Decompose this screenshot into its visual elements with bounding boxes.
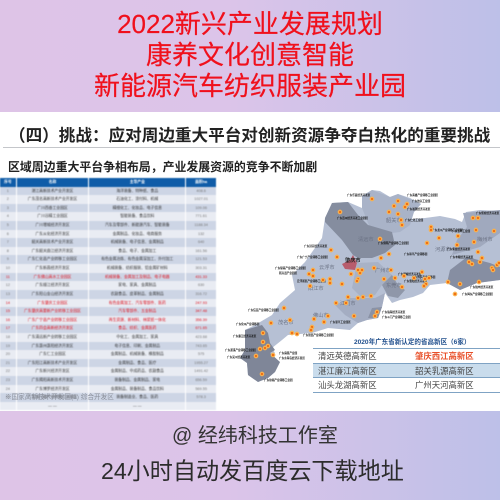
park name labels [225, 193, 500, 382]
table: regional platforms: 汽车及零部件、新能源汽车、智能装备 [105, 223, 170, 227]
table: regional platforms: 17 [6, 326, 10, 330]
table: regional platforms: — — [48, 404, 57, 408]
park name labels: 广东斗门产业转移工业园 [382, 315, 411, 319]
zone name: 韶关乳源高新区 [415, 366, 474, 376]
table: regional platforms: 6 [7, 232, 9, 236]
table: regional platforms: 石油化工、涂付料、机械 [116, 197, 158, 201]
park name labels: 广东惠阳经济开发区 [404, 279, 428, 283]
table: regional platforms: 23 [6, 378, 10, 382]
table: regional platforms: 广川谷精工业园区 [37, 214, 68, 218]
row highlight [313, 363, 500, 377]
park name labels: 广东吴川经济开发区 [227, 355, 251, 359]
park name labels: 广东蕉岭经济开发区 [476, 211, 500, 215]
table: regional platforms: 金属制品、食品、医疗 [118, 361, 156, 365]
table: regional platforms: 广东阳江高新技术产业开发区 [28, 361, 77, 365]
city labels: 梅州市 [477, 235, 493, 243]
table: regional platforms: 广东清远新产业转移工业园区 [28, 335, 77, 339]
table: regional platforms: 575 [198, 352, 204, 356]
table: regional platforms: 广东新兴经济开发区 [35, 369, 70, 373]
table: regional platforms: 640 [198, 240, 204, 244]
table: regional platforms: 21 [6, 361, 10, 365]
park name labels: 广东阳西产业转移工业园区 [303, 333, 335, 337]
table: regional platforms: 广川西香工业园区 [37, 206, 68, 210]
table: regional platforms: 771.61 [195, 214, 207, 218]
footer band [0, 411, 500, 500]
table: regional platforms: 广东仁化县产业转移工业园区 [28, 257, 77, 261]
footer download note: 24小时自动发百度云下载地址 [101, 458, 404, 484]
table: regional platforms: 广东肇庆高要新产业转移工业园区 [24, 309, 81, 313]
heading rule [3, 147, 500, 148]
park name labels: 广东广宁产业转移工业园区 [297, 255, 329, 259]
city labels: 茂名市 [278, 318, 294, 326]
city labels [278, 216, 493, 326]
park name labels: 广东恩平工业园区 [330, 320, 351, 324]
park name labels: 广东信宜产业转移工业园区 [248, 308, 280, 312]
table: regional platforms: 7 [7, 240, 9, 244]
table: regional platforms: 湛江高新技术产业开发区 [32, 189, 73, 193]
table: regional platforms: 广东广宁县产业转移工业园区 [28, 318, 77, 322]
table: regional platforms: 农副食品、皮革制品、金属制品 [111, 292, 164, 296]
park name labels: 广东廉江经济开发区 [233, 334, 257, 338]
table: regional platforms: 8 [7, 249, 9, 253]
table: regional platforms: 12 [6, 283, 10, 287]
table: regional platforms: 有色金属冶炼、有色金属深加工、外付加工 [101, 257, 173, 261]
table: regional platforms: 广东佛山高水工业园区 [34, 275, 71, 279]
table: regional platforms: 18 [6, 335, 10, 339]
table: regional platforms: 广东韶关曲江经济开发区 [32, 249, 73, 253]
table: regional platforms: 1 [7, 189, 9, 193]
table: regional platforms: — — [133, 404, 142, 408]
table: regional platforms: 578.3 [196, 395, 206, 399]
zone name: 湛江廉江高新区 [318, 366, 377, 376]
table: regional platforms: 汽车零部件、五金制品 [118, 309, 156, 313]
city labels: 韶关市 [386, 216, 402, 224]
table: regional platforms: 132 [198, 232, 204, 236]
zone name: 广州天河高新区 [415, 380, 474, 390]
park name labels: 广东遂溪产业转移工业园区 [225, 348, 257, 352]
park name labels: 广东乐昌经济开发区 [347, 193, 371, 197]
table: regional platforms: 装备制造业、食品、医药 [116, 395, 158, 399]
table: regional platforms: 广东肇庆工业园区 [37, 301, 68, 305]
city labels: 江门市 [340, 299, 356, 307]
table: regional platforms: 广东仁工业园区 [39, 352, 66, 356]
table: regional platforms: 广东惠州惠阳经济开发区 [32, 344, 73, 348]
table: regional platforms: 面积ha [195, 180, 207, 184]
table: regional platforms: 食品、纺织、金属医药 [118, 326, 156, 330]
table: regional platforms: 247.93 [195, 301, 207, 305]
table: regional platforms: 机械装备、电子信息、金属制品 [111, 240, 164, 244]
zone name highlighted: 肇庆西江高新区 [415, 351, 474, 361]
park name labels: 广东徐闻产业转移工业园 [264, 378, 293, 382]
table: regional platforms: 食品、电子、金属加工 [118, 249, 156, 253]
park name labels: 广东五华工业园 [452, 229, 471, 233]
table: regional platforms: 423.68 [195, 335, 207, 339]
table: regional platforms: 装备制品、金属制品、家电 [114, 378, 160, 382]
title: 康养文化创意智能 [146, 40, 354, 70]
park name labels: 广东和平产业转移园 [404, 252, 428, 256]
table: regional platforms: 金属制品、中成药品、农副食品 [111, 369, 164, 373]
table: regional platforms: 347.48 [195, 309, 207, 313]
table: regional platforms: 广东揭阳高新技术开发区 [32, 378, 73, 382]
table: regional platforms: 广东博罗经济开发区 [35, 387, 70, 391]
park name labels: 广东陆丰经济开发区 [470, 285, 494, 289]
city labels: 河源市 [435, 245, 451, 253]
table: regional platforms: 广东四会高新经济开发区 [32, 326, 73, 330]
park name labels: 广东丰顺经济开发区 [450, 255, 474, 259]
table: regional platforms: 机械装备、纺织服装、铝金属矿材料 [107, 266, 168, 270]
table: regional platforms: 有色金属加工、汽车零部件、医药 [109, 301, 166, 305]
table: regional platforms: 1491.42 [194, 369, 208, 373]
table: regional platforms: 356.39 [195, 318, 207, 322]
table: regional platforms: 743.65 [195, 344, 207, 348]
table: regional platforms: 再生资源、新材料、林浆纸一体化 [109, 318, 166, 322]
title: 2022新兴产业发展规划 [117, 8, 383, 38]
table: regional platforms: 广川增城经济开发区 [35, 223, 70, 227]
park name labels: 广东南雄产业转移工业园区 [407, 193, 439, 197]
park name labels: 新兴县产业园区 [279, 271, 298, 275]
table: regional platforms: 中化工、金属加工、家具 [116, 335, 158, 339]
table: regional platforms: 161.56 [195, 249, 207, 253]
city labels: 云浮市 [319, 263, 335, 271]
park name labels: 广东始兴工业园 [412, 199, 431, 203]
table: regional platforms: 3 [7, 206, 9, 210]
table: regional platforms: 569.55 [195, 387, 207, 391]
table: regional platforms: 精细化工、化妆品、电子信息 [113, 206, 162, 210]
red label: Zhaoqing: 肇庆市 [345, 256, 361, 264]
park name labels: 广东佛冈产业转移工业园区 [378, 241, 410, 245]
park name labels: 广东龙川产业转移工业园区 [432, 228, 464, 232]
table: regional platforms: 11 [6, 275, 10, 279]
table: regional platforms: 16 [6, 318, 10, 322]
table footnote overlay: ※国家高新技术开发区(1) 综合开发区 [5, 394, 114, 401]
table: regional platforms: 19 [6, 344, 10, 348]
table: regional platforms: 1027.01 [194, 197, 208, 201]
city labels: 佛山市 [313, 311, 329, 319]
zone name: 清远英德高新区 [318, 351, 377, 361]
new high-tech zones title: 2020年广东省新认定的省高新区（6家） [354, 339, 470, 346]
title [94, 8, 406, 100]
table: regional platforms: 13 [6, 292, 10, 296]
table: regional platforms: 24 [6, 387, 10, 391]
table: regional platforms: 广东龙门县产业转移工业园区 [28, 395, 77, 399]
table: regional platforms: 20 [6, 352, 10, 356]
table: regional platforms: 5 [7, 223, 9, 227]
new high-tech zones table [313, 348, 500, 393]
table: regional platforms: 671.65 [195, 326, 207, 330]
park name labels: 广东珠海经济开发区 [382, 310, 406, 314]
table: regional platforms: 15 [6, 309, 10, 313]
table: regional platforms: 25 [6, 395, 10, 399]
table: regional platforms: 广东从化经济开发区 [35, 232, 70, 236]
table: regional platforms: 广东顺江经济开发区 [35, 283, 70, 287]
table: regional platforms: 金属制品、化妆品、电商服务 [113, 232, 162, 236]
header band [0, 0, 500, 112]
table: regional platforms: 22 [6, 369, 10, 373]
table: regional platforms: 316.72 [195, 292, 207, 296]
table: regional platforms: 韶关高新技术产业开发区 [32, 240, 73, 244]
table: regional platforms: 10 [6, 266, 10, 270]
table rules [313, 348, 500, 349]
park name labels: 广东封开经济开发区 [304, 244, 328, 248]
table: regional platforms: 名称 [49, 180, 56, 184]
table: regional platforms: 序号 [4, 180, 12, 184]
park name labels: 云浮新区产业转移工业园 [297, 279, 326, 283]
table: regional platforms: 2 [7, 197, 9, 201]
footer studio credit: @ 经纬科技工作室 [172, 425, 338, 447]
city labels: 清远市 [358, 235, 374, 243]
park name labels: 广东郁南产业转移工业园区 [275, 266, 307, 270]
table: regional platforms: 电子信息、印刷、金属制品 [114, 344, 160, 348]
park name labels: 广东麻章产业园 [279, 351, 298, 355]
table: regional platforms: 14 [6, 301, 10, 305]
sub heading: 区域周边重大平台争相布局，产业发展资源的竞争不断加剧 [8, 160, 317, 174]
table: regional platforms: 机械装备、金属加工及制品、电子电器 [105, 275, 170, 279]
city labels: 广州市 [375, 266, 391, 274]
table: regional platforms: 广东阳山金山经济开发区 [32, 292, 73, 296]
park name labels: 广东仁化工业园 [405, 218, 424, 222]
park name labels: 广东博罗产业转移园 [412, 275, 436, 279]
table: regional platforms: 家电、家具、金属制品 [118, 283, 156, 287]
table: regional platforms: 广东新昌经济开发区 [35, 266, 70, 270]
zone name: 汕头龙湖高新区 [318, 380, 377, 390]
table: regional platforms: 656.59 [195, 378, 207, 382]
table: regional platforms: 智能装备、食品饮料 [120, 214, 154, 218]
table: regional platforms: 金属制品、机械装备、橡胶制品 [111, 352, 164, 356]
park name labels: 广东化州产业转移园 [236, 322, 260, 326]
table: regional platforms: 广东茂名高新技术产业开发区 [28, 197, 77, 201]
table: regional platforms: 109.06 [195, 206, 207, 210]
map regions [240, 190, 500, 382]
park name labels: 广东紫金经济开发区 [447, 247, 471, 251]
city labels: 东莞市 [386, 281, 402, 289]
park name labels: 广东连州经济开发工业园区 [337, 216, 369, 220]
table: regional platforms: 海洋装备、特种纸、食品 [116, 189, 158, 193]
park markers [254, 197, 500, 376]
table: regional platforms: 9 [7, 257, 9, 261]
table: regional platforms: 主导产业 [130, 180, 145, 184]
table: regional platforms: 1188.34 [194, 223, 208, 227]
title: 新能源汽车纺织服装产业园 [94, 70, 406, 100]
park name labels: 广东东海岛经济开发区 [279, 356, 305, 360]
table: regional platforms: 630 [198, 283, 204, 287]
table: regional platforms: 1955.27 [194, 361, 208, 365]
table: regional platforms [0, 177, 217, 410]
park name labels: 广东揭东产业转移工业园区 [462, 292, 494, 296]
table: regional platforms: 4 [7, 214, 9, 218]
table: regional platforms: 303.31 [195, 266, 207, 270]
table: regional platforms: 431.33 [195, 275, 207, 279]
section heading: （四）挑战：应对周边重大平台对创新资源争夺白热化的重要挑战 [9, 126, 490, 145]
city labels: 阳江市 [308, 284, 324, 292]
table: regional platforms: 408.6 [196, 189, 206, 193]
table: regional platforms: 121.53 [195, 257, 207, 261]
park name labels: 广东增城经济开发区 [398, 272, 422, 276]
table: regional platforms: 金属制品、装备制品、食品饮料 [111, 387, 164, 391]
park name labels: 广东翁源经济开发区 [407, 207, 431, 211]
